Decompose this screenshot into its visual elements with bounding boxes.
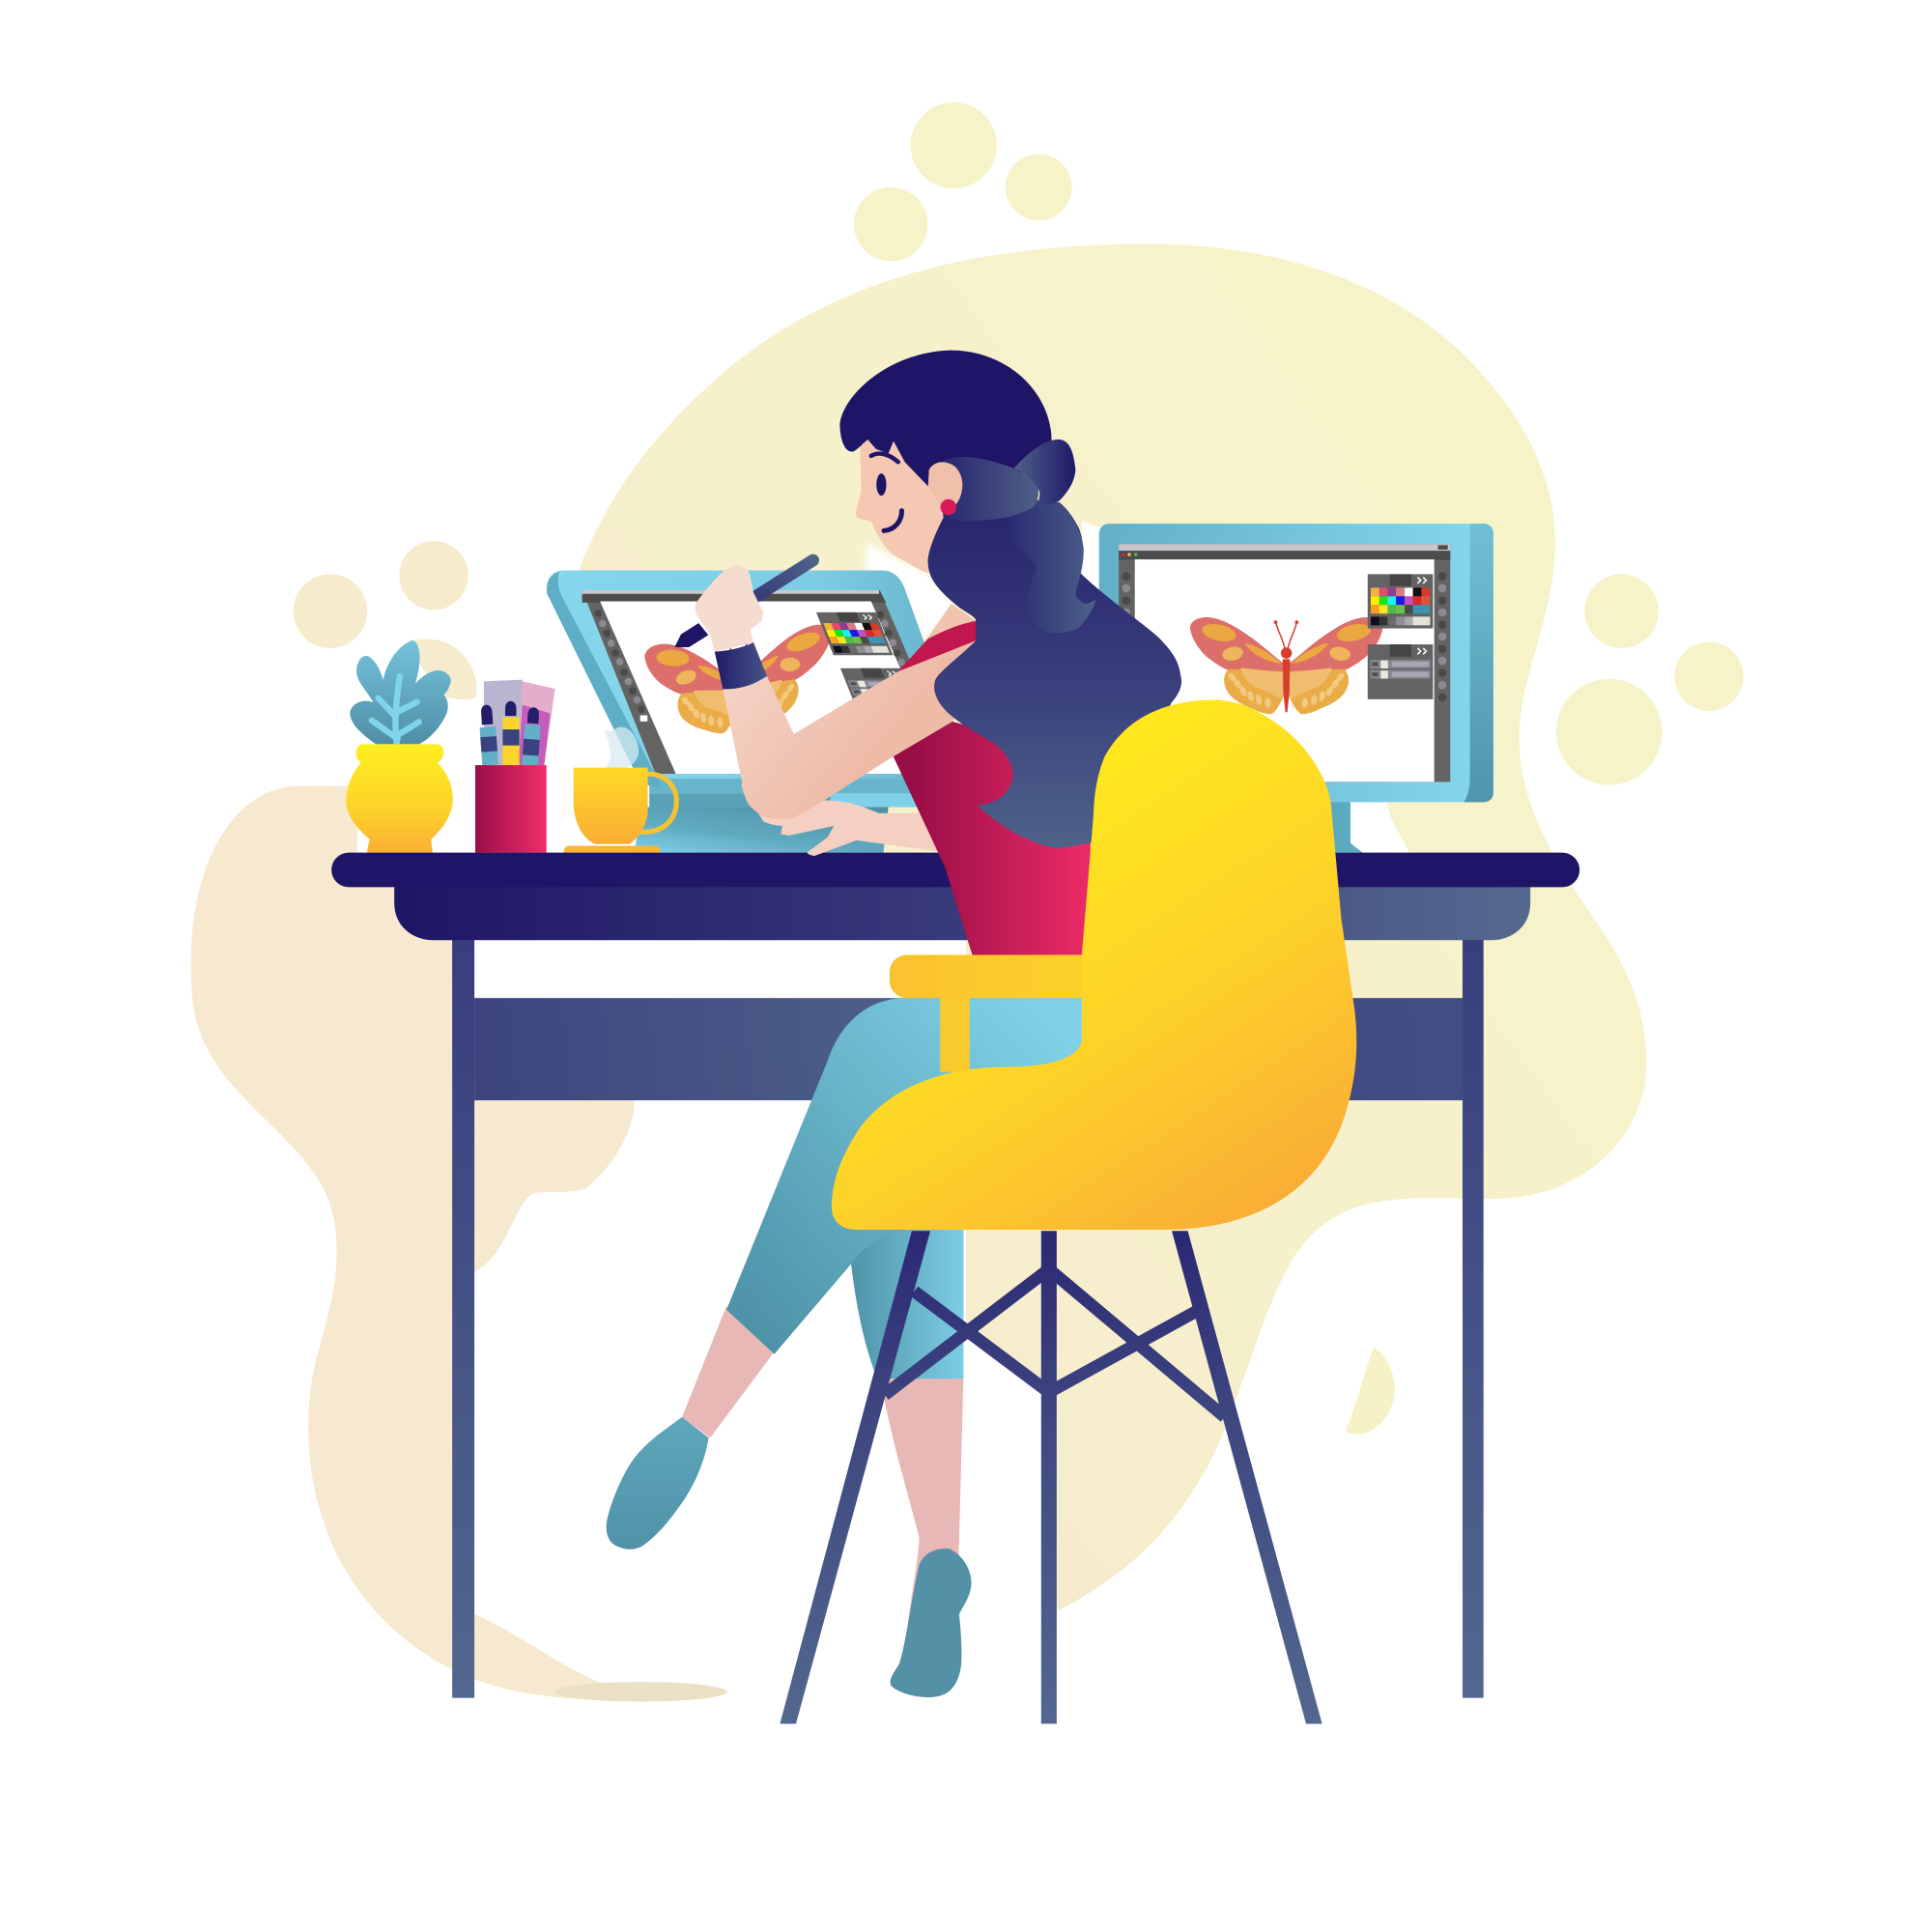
red cup xyxy=(475,765,547,853)
ear xyxy=(928,462,962,513)
monitor frame xyxy=(1099,524,1493,802)
hand with pen xyxy=(696,565,763,652)
woman xyxy=(607,351,1181,1697)
tablet light strip xyxy=(831,793,927,807)
desk top xyxy=(331,853,1579,887)
small blob right xyxy=(1346,1347,1395,1435)
tool buttons xyxy=(1122,572,1446,701)
hair bow xyxy=(936,457,1038,521)
eyebrow xyxy=(871,454,898,462)
armrest xyxy=(890,955,1099,998)
dress xyxy=(894,721,1091,985)
pen upper xyxy=(754,560,813,598)
tablet canvas xyxy=(600,601,947,774)
tablet lower band xyxy=(649,775,974,793)
bubbles: top xyxy=(854,102,1072,261)
coffee mug xyxy=(564,768,676,853)
monitor: desktop display xyxy=(1099,524,1493,853)
shoe right xyxy=(891,1548,972,1697)
wristband xyxy=(715,642,767,689)
tablet title bar xyxy=(582,590,886,603)
hair bun xyxy=(1014,440,1075,507)
desk leg right xyxy=(1463,936,1484,1698)
pencil holder xyxy=(475,680,555,853)
face xyxy=(856,419,967,573)
tablet colour palette xyxy=(816,612,893,655)
mug body xyxy=(574,768,648,844)
colour palette panel xyxy=(1368,574,1433,629)
stool frame xyxy=(780,1231,1322,1723)
pot xyxy=(346,744,453,853)
bubbles: right xyxy=(1556,574,1744,784)
trousers: back leg xyxy=(848,1220,963,1378)
desk xyxy=(394,881,1530,1698)
long hair xyxy=(928,502,1181,848)
plant xyxy=(346,640,453,853)
blob: left peach shape xyxy=(191,786,727,1701)
layers panel xyxy=(1368,644,1433,699)
desk apron xyxy=(394,881,1530,940)
chair xyxy=(780,699,1356,1723)
marker left xyxy=(478,704,498,766)
tablet screen chrome xyxy=(582,590,958,774)
screen chrome xyxy=(1119,544,1450,781)
marker right xyxy=(522,707,542,766)
blob: main cream shape xyxy=(579,244,1646,1611)
shoe left xyxy=(607,1417,709,1549)
white gaps behind the monitor xyxy=(1082,522,1409,853)
floor shadow xyxy=(554,1682,727,1701)
mug handle xyxy=(639,774,676,832)
swatch card pink xyxy=(519,681,555,765)
desk crossbar xyxy=(474,998,1463,1100)
tablet butterfly artwork xyxy=(644,623,832,743)
hair lock xyxy=(1008,499,1096,633)
tablet tool buttons xyxy=(594,610,905,722)
swatch card magenta xyxy=(519,705,551,765)
leaves xyxy=(350,640,451,744)
leg: skin front xyxy=(682,1306,775,1438)
hair cap xyxy=(839,351,1052,493)
monitor side edge xyxy=(1463,524,1493,802)
tablet frame xyxy=(547,571,974,779)
tablet mid band xyxy=(649,793,835,807)
arm xyxy=(723,640,976,819)
smile xyxy=(884,511,901,530)
mug saucer xyxy=(564,846,661,853)
eye xyxy=(876,473,886,496)
title bar xyxy=(1119,544,1450,560)
pen nib xyxy=(674,623,708,647)
tablet base xyxy=(635,807,889,853)
white glow under the chin xyxy=(865,542,956,640)
bubbles: left xyxy=(294,541,476,699)
neck xyxy=(926,604,976,639)
desk leg left xyxy=(452,936,474,1698)
butterfly artwork xyxy=(1190,617,1382,714)
leaf veins xyxy=(372,676,419,743)
dress strap xyxy=(898,621,980,671)
trousers: front leg xyxy=(726,998,1084,1354)
monitor stand xyxy=(1319,801,1363,853)
tablet xyxy=(547,571,974,853)
swatch card grey xyxy=(484,680,523,765)
hand on tablet xyxy=(758,800,949,856)
chair shell xyxy=(832,699,1356,1230)
tablet title bar highlight xyxy=(582,590,879,594)
canvas xyxy=(1135,559,1435,781)
earring xyxy=(940,499,956,515)
chair post xyxy=(940,996,970,1072)
tablet side edge xyxy=(547,572,663,788)
steam xyxy=(604,727,639,769)
leg: skin back xyxy=(880,1374,963,1651)
marker centre xyxy=(502,701,520,765)
tablet layers panel xyxy=(840,668,918,712)
